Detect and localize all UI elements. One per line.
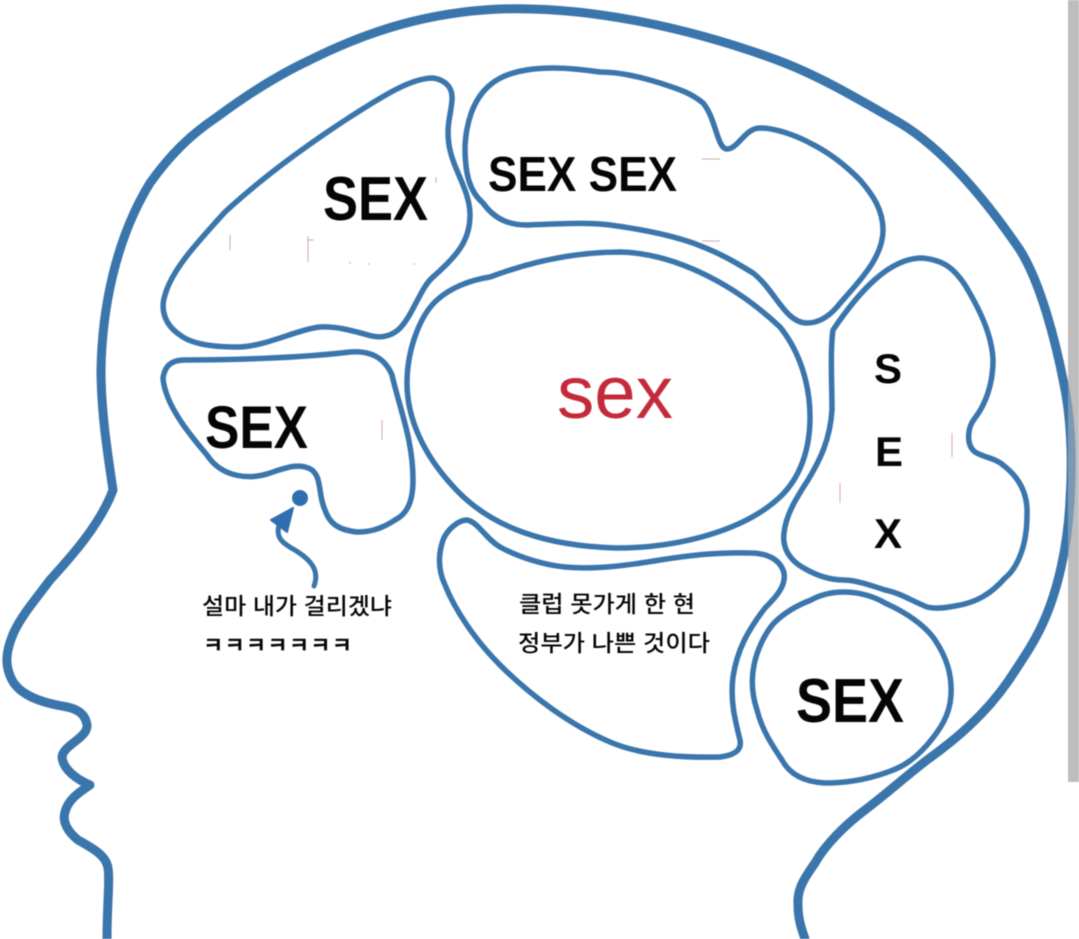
label: sex: sex xyxy=(557,351,673,434)
icon: dot xyxy=(292,490,308,506)
region: lower right circle xyxy=(752,592,951,783)
label: vertical SEX: X xyxy=(874,510,902,557)
region: top left xyxy=(163,78,470,347)
label: SEX SEX: SEX SEX xyxy=(488,148,677,202)
label: Korean caption: 정부가 나쁜 것이다 xyxy=(518,630,710,656)
region: left xyxy=(163,352,413,532)
caption: speech text xyxy=(202,593,392,658)
gray side bar xyxy=(1068,0,1079,782)
label: SEX: SEX xyxy=(205,394,308,461)
region: right xyxy=(784,258,1027,608)
label: SEX: SEX xyxy=(796,667,904,736)
label: vertical SEX: S xyxy=(874,345,902,392)
region: lower centre xyxy=(439,520,784,757)
label: vertical SEX: E xyxy=(875,428,903,475)
label: vertical SEX xyxy=(874,345,903,557)
caption: speech text: 설마 내가 걸리겠냐 xyxy=(202,593,392,619)
label: SEX: SEX xyxy=(323,165,428,234)
region: top centre xyxy=(465,68,883,323)
label: Korean caption: 클럽 못가게 한 현 xyxy=(519,591,695,617)
region: centre xyxy=(407,252,810,548)
arrow xyxy=(271,508,316,586)
label: Korean caption xyxy=(518,591,710,656)
caption: speech text: ㅋㅋㅋㅋㅋㅋㅋ xyxy=(203,633,352,658)
